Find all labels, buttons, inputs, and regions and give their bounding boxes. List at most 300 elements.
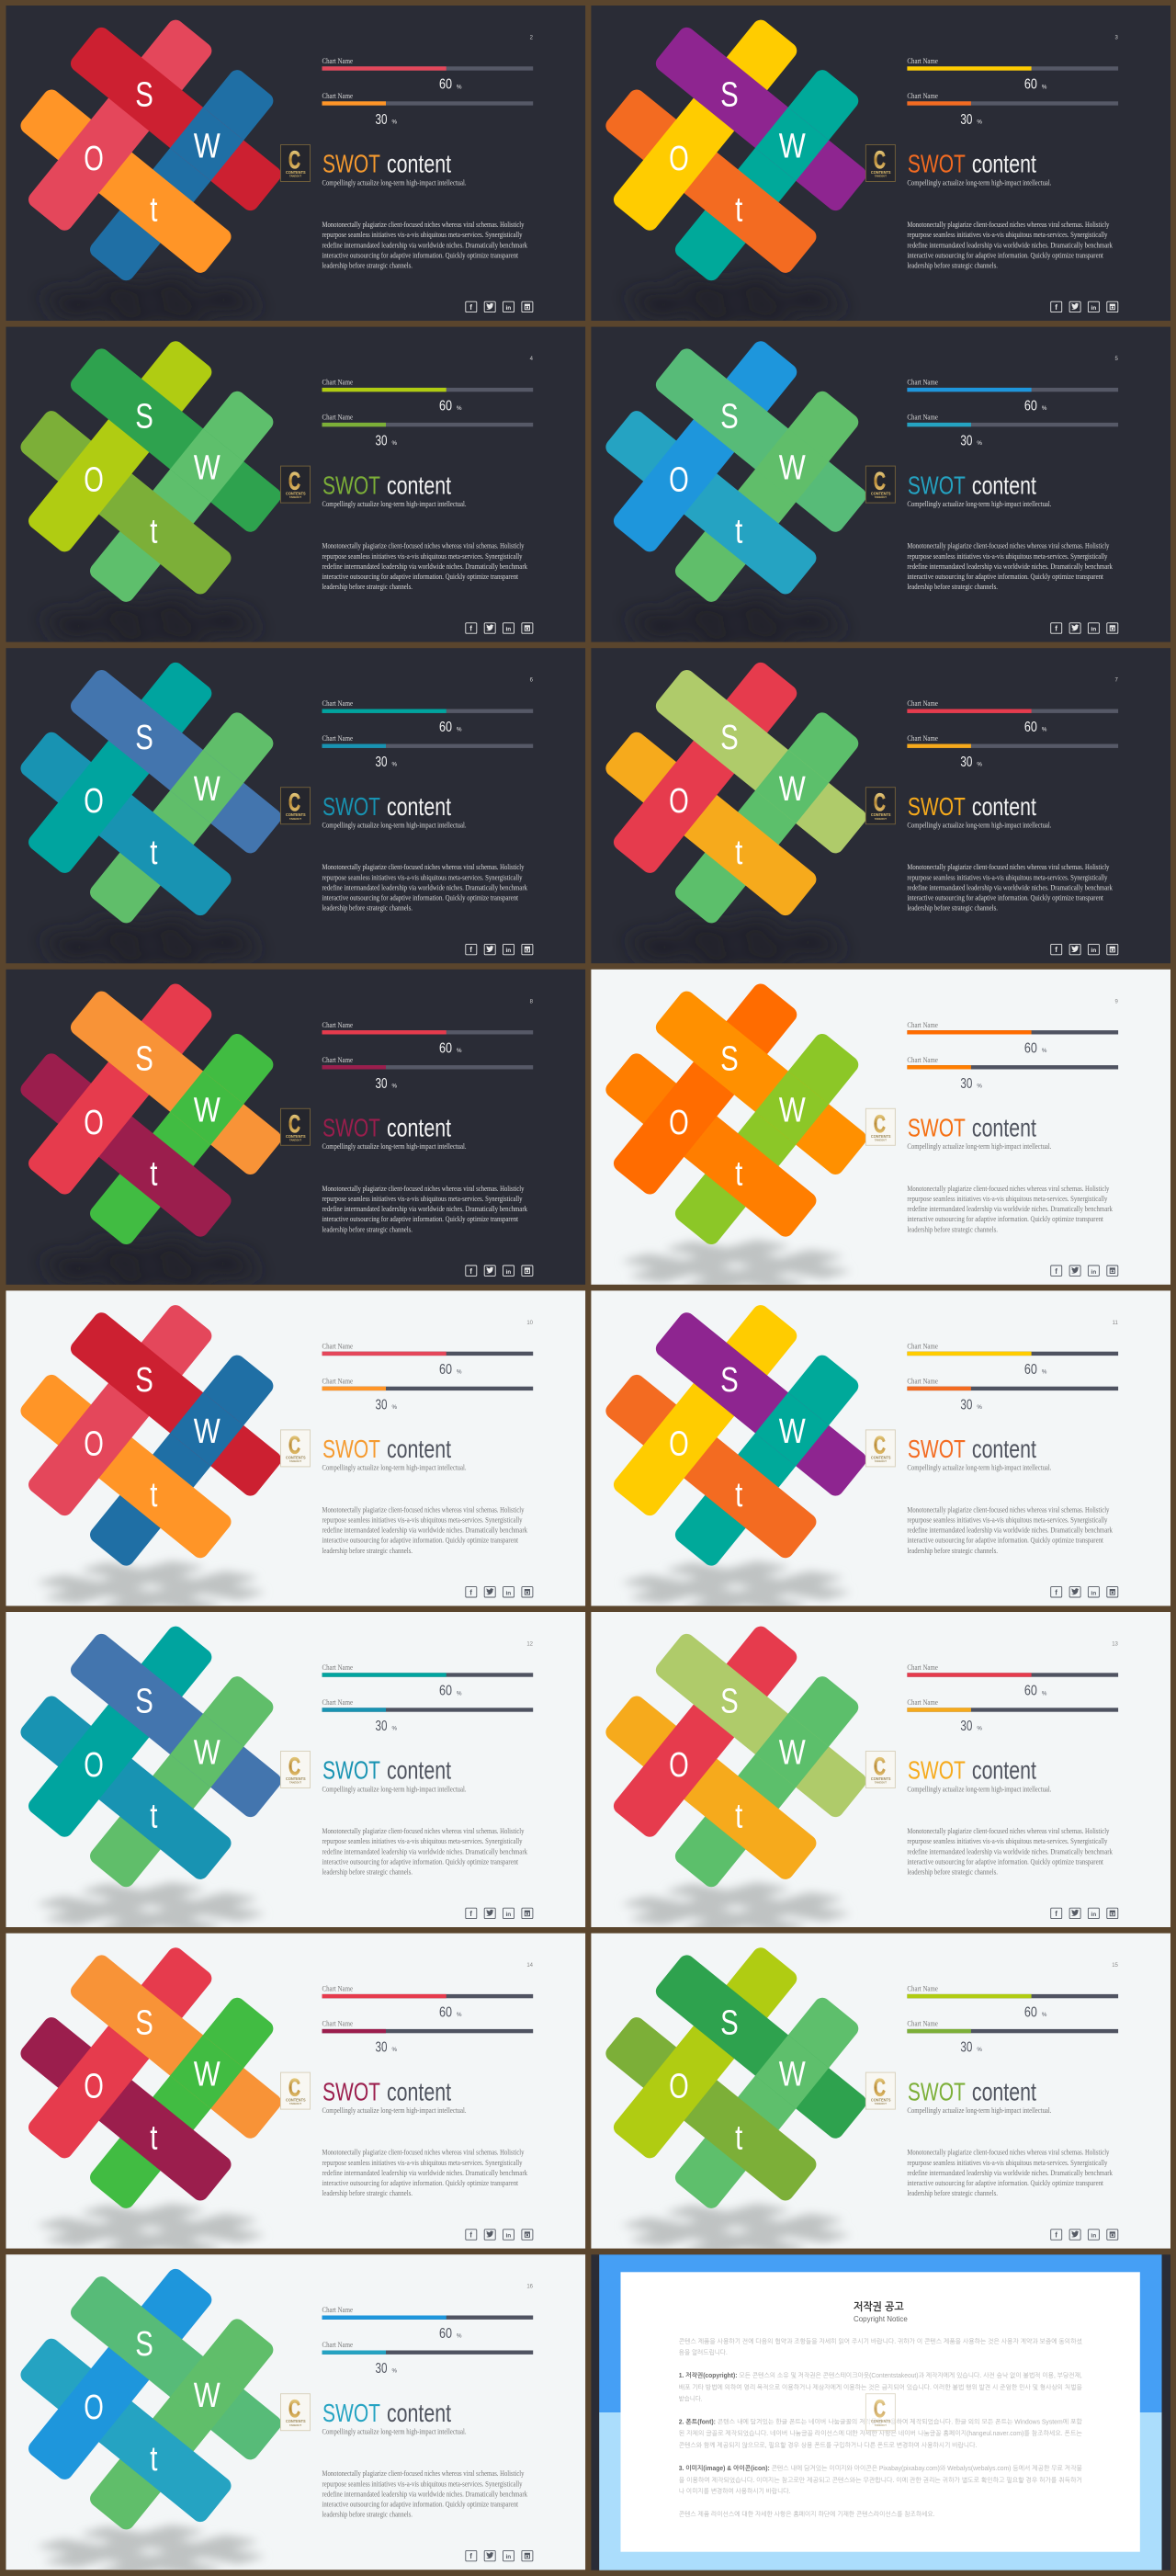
title: content [972, 1114, 1036, 1142]
progress chart 30% [907, 1698, 1118, 1734]
body text: redefine intermandated leadership via worldwide niches. Dramatically benchmark [907, 241, 1114, 249]
body text: repurpose seamless initiatives vis-a-vis ubiquitous meta-services. Synergistically [322, 231, 523, 239]
logo badge [281, 788, 311, 824]
body text: interactive outsourcing for adaptive information. Quickly optimize transparent [322, 2500, 519, 2508]
progress chart 60% [907, 699, 1118, 735]
body text: redefine intermandated leadership via worldwide niches. Dramatically benchmark [322, 2169, 528, 2177]
progress chart 60%: Chart Name [322, 699, 353, 708]
SWOT woven bars [603, 981, 870, 1248]
progress chart 30%: 30 [375, 755, 388, 770]
progress chart 30%: 30 [375, 2040, 388, 2056]
title [322, 1114, 451, 1141]
logo badge: C [288, 1431, 300, 1458]
social icons [1051, 944, 1118, 955]
social icons: in [505, 1269, 511, 1276]
logo badge: TAKEOUT [289, 2423, 301, 2427]
progress chart 30%: Chart Name [322, 734, 353, 743]
logo badge: CONTENTS [286, 2419, 306, 2423]
notice heading: 저작권 공고 [854, 2300, 904, 2313]
logo badge [281, 2394, 311, 2431]
social icons: in [505, 2233, 511, 2240]
social icons: f [469, 1588, 472, 1596]
body text: repurpose seamless initiatives vis-a-vis ubiquitous meta-services. Synergistically [907, 552, 1108, 561]
body text [322, 1185, 528, 1233]
logo badge: CONTENTS [871, 170, 891, 175]
progress chart 30% [907, 92, 1118, 128]
title [908, 1435, 1036, 1463]
social icons: in [505, 1590, 511, 1596]
body text: repurpose seamless initiatives vis-a-vis ubiquitous meta-services. Synergistically [322, 2159, 523, 2167]
logo badge: C [874, 2395, 886, 2423]
logo badge: TAKEOUT [289, 817, 301, 821]
progress chart 30% [322, 1698, 533, 1734]
SWOT woven bars: W [194, 1092, 220, 1130]
social icons: f [469, 625, 472, 633]
social icons [1051, 1587, 1118, 1597]
title: SWOT [322, 471, 380, 499]
page number: 11 [1113, 1321, 1119, 1326]
title [322, 2077, 451, 2105]
notice body text: 콘텐스 제품을 사용하기 전에 다음의 협약과 조항들을 자세히 읽어 주시기 바랍니다. 귀하가 이 콘텐스 제품을 사용하는 것은 사용자 계약과 보증에 동의하셨 [679, 2338, 1082, 2345]
progress chart 60% [907, 1985, 1118, 2020]
panel: SWOT slide 4 [6, 327, 585, 651]
body text [322, 221, 528, 270]
body text: Monotonectally plagiarize client-focused niches whereas viral schemas. Holisticly [907, 863, 1110, 871]
social icons: f [1055, 1910, 1057, 1918]
SWOT woven bars: S [135, 2325, 153, 2364]
body text: repurpose seamless initiatives vis-a-vis ubiquitous meta-services. Synergistically [322, 1195, 523, 1203]
SWOT woven bars: S [135, 1683, 153, 1721]
progress chart 60%: % [1042, 85, 1047, 90]
panel: SWOT slide 7 [591, 648, 1170, 971]
progress chart 30% [322, 92, 533, 128]
logo badge: TAKEOUT [875, 1459, 887, 1463]
SWOT woven bars: W [779, 2055, 806, 2094]
progress chart 60% [907, 1021, 1118, 1057]
social icons: in [505, 305, 511, 312]
notice body text: 된 자체의 글꼴로 제작되었습니다. 네이버 나눔글꼴 라이선스에 대한 자세한 사항은 네이버 나눔글꼴 홈페이지(hangeul.naver.com)를 참조하세요. 폰트는 [679, 2430, 1082, 2437]
title: SWOT [322, 2077, 380, 2105]
SWOT woven bars: W [779, 1734, 806, 1773]
social icons [1051, 1908, 1118, 1919]
SWOT woven bars: W [194, 448, 220, 487]
social icons: in [505, 2554, 511, 2560]
notice body text: 2. 폰트(font): 콘텐스 내에 담겨있는 한글 폰트는 네이버 나눔글꼴의 저작물을 이용하여 제작되었습니다. 한글 외의 모든 폰트는 Windows System에 포함 [679, 2419, 1082, 2426]
social icons: in [1091, 1269, 1096, 1276]
logo badge: TAKEOUT [289, 175, 301, 178]
progress chart 60%: % [457, 1049, 462, 1054]
logo badge: C [874, 789, 886, 816]
SWOT woven bars: t [735, 512, 743, 550]
shadow under SWOT mark [39, 2200, 263, 2249]
SWOT woven bars [17, 659, 285, 926]
social icons: in [1091, 948, 1096, 954]
body text: interactive outsourcing for adaptive information. Quickly optimize transparent [907, 1537, 1103, 1545]
body text: leadership before strategic channels. [907, 904, 998, 913]
panel: SWOT slide 14 [6, 1934, 585, 2257]
notice body text: 나 이미지를 변경하여 사용하시기 바랍니다. [679, 2488, 790, 2495]
SWOT woven bars [17, 1623, 285, 1890]
notice body text: 을 이용하여 제작되었습니다. 이미지는 참고로만 제공되고 콘텐스와는 무관합니다. 이에 관한 권리는 귀하가 별도로 확인하고 필요할 경우 허가를 취득하거 [679, 2477, 1082, 2484]
social icons [466, 301, 533, 312]
progress chart 30% [907, 2020, 1118, 2056]
body text [322, 863, 528, 913]
notice body text: 배포 기타 방법에 의하여 영리 목적으로 이용하거나 제삼자에게 이용하는 것은 금지되어 있습니다. 이러한 불법 행위 발견 시 준엄한 민사 및 형사상의 처벌을 [679, 2384, 1082, 2391]
SWOT woven bars: W [194, 770, 220, 809]
SWOT woven bars: O [84, 140, 104, 178]
progress chart 30%: % [391, 119, 398, 125]
progress chart 60%: Chart Name [322, 1342, 353, 1350]
body text: redefine intermandated leadership via worldwide niches. Dramatically benchmark [322, 2490, 528, 2498]
body text: repurpose seamless initiatives vis-a-vis ubiquitous meta-services. Synergistically [322, 552, 523, 561]
notice body text: 3. 이미지(image) & 아이콘(icon): 콘텐스 내에 담겨있는 이미지와 아이콘은 Pixabay(pixabay.com)와 Webalys(webalys.com) 등에서 제공한 무료 저작물 [679, 2465, 1082, 2472]
shadow under SWOT mark [35, 2525, 267, 2576]
panel: SWOT slide 10 [6, 1290, 585, 1614]
social icons [466, 1587, 533, 1597]
subtitle: Compellingly actualize long-term high-impact intellectual. [322, 822, 467, 830]
logo badge: CONTENTS [871, 1776, 891, 1781]
body text: leadership before strategic channels. [907, 1867, 998, 1877]
body text: redefine intermandated leadership via worldwide niches. Dramatically benchmark [907, 1526, 1114, 1535]
body text: interactive outsourcing for adaptive information. Quickly optimize transparent [322, 1215, 519, 1223]
SWOT woven bars [603, 1945, 870, 2211]
progress chart 60% [322, 57, 533, 93]
body text: repurpose seamless initiatives vis-a-vis ubiquitous meta-services. Synergistically [907, 1516, 1108, 1525]
SWOT woven bars: t [735, 834, 743, 872]
shadow under SWOT mark [620, 2204, 853, 2257]
logo badge: CONTENTS [286, 1455, 306, 1459]
shadow under SWOT mark [643, 279, 829, 321]
page number: 6 [530, 678, 534, 684]
SWOT woven bars [603, 338, 870, 605]
SWOT woven bars: t [735, 191, 743, 230]
progress chart 30%: Chart Name [907, 1377, 938, 1385]
body text: interactive outsourcing for adaptive information. Quickly optimize transparent [907, 573, 1103, 581]
progress chart 30%: % [977, 441, 983, 447]
notice body text [679, 2338, 1082, 2518]
SWOT woven bars: W [779, 128, 806, 166]
body text: Monotonectally plagiarize client-focused niches whereas viral schemas. Holisticly [322, 542, 525, 550]
body text: interactive outsourcing for adaptive information. Quickly optimize transparent [907, 251, 1103, 259]
progress chart 60% [907, 379, 1118, 414]
social icons [1051, 2230, 1118, 2240]
social icons [466, 2550, 533, 2561]
body text: leadership before strategic channels. [907, 261, 998, 270]
SWOT woven bars: t [150, 1155, 158, 1194]
SWOT woven bars: S [720, 397, 739, 436]
panel: copyright notice [591, 2254, 1170, 2570]
shadow under SWOT mark [643, 600, 830, 642]
logo badge: CONTENTS [286, 1776, 306, 1781]
progress chart 30%: % [391, 1405, 398, 1411]
SWOT woven bars: W [194, 128, 220, 166]
subtitle: Compellingly actualize long-term high-impact intellectual. [322, 2427, 467, 2435]
SWOT woven bars: S [135, 1040, 153, 1079]
body text: redefine intermandated leadership via worldwide niches. Dramatically benchmark [907, 2169, 1114, 2177]
title: SWOT [908, 1114, 966, 1142]
progress chart 30%: 30 [375, 1719, 388, 1734]
social icons: in [1091, 1912, 1096, 1918]
progress chart 30%: % [391, 2048, 398, 2053]
logo badge: C [874, 146, 886, 174]
progress chart 60%: Chart Name [907, 1663, 938, 1672]
progress chart 60%: Chart Name [907, 1342, 938, 1350]
logo badge [865, 145, 895, 182]
title: SWOT [908, 792, 966, 821]
logo badge: C [874, 1431, 886, 1458]
progress chart 60%: Chart Name [322, 2306, 353, 2314]
SWOT woven bars: t [150, 2118, 158, 2157]
SWOT woven bars: S [720, 1683, 739, 1721]
SWOT woven bars: t [735, 1798, 743, 1836]
body text: repurpose seamless initiatives vis-a-vis ubiquitous meta-services. Synergistically [322, 1837, 523, 1845]
progress chart 60%: 60 [439, 2326, 452, 2342]
progress chart 30%: % [977, 1405, 983, 1411]
progress chart 30%: 30 [375, 1076, 388, 1092]
logo badge: C [874, 1753, 886, 1780]
body text: repurpose seamless initiatives vis-a-vis ubiquitous meta-services. Synergistically [907, 1195, 1108, 1203]
logo badge: C [288, 146, 300, 174]
page number: 4 [530, 357, 534, 362]
progress chart 60% [322, 1985, 533, 2020]
logo badge: CONTENTS [871, 1134, 891, 1139]
body text: repurpose seamless initiatives vis-a-vis ubiquitous meta-services. Synergistically [907, 1837, 1108, 1845]
title [908, 471, 1036, 499]
shadow under SWOT mark [39, 1878, 263, 1927]
logo badge [865, 466, 895, 503]
notice body text: 콘텐스와 함께 제공되지 않으므로, 필요할 경우 상용 폰트를 구입하거나 다른 폰트로 변경하여 사용하시기 바랍니다. [679, 2442, 977, 2449]
SWOT woven bars: W [779, 1092, 806, 1130]
subtitle: Compellingly actualize long-term high-impact intellectual. [907, 1142, 1051, 1151]
progress chart 60%: % [1042, 728, 1047, 733]
body text: leadership before strategic channels. [322, 1867, 413, 1877]
SWOT woven bars [17, 1301, 285, 1569]
body text: redefine intermandated leadership via worldwide niches. Dramatically benchmark [322, 1847, 528, 1855]
progress chart 60%: 60 [1024, 2004, 1037, 2020]
subtitle: Compellingly actualize long-term high-impact intellectual. [322, 178, 467, 187]
title: content [387, 1756, 451, 1785]
social icons: in [1091, 2233, 1096, 2240]
logo badge: TAKEOUT [289, 1138, 301, 1141]
progress chart 30%: Chart Name [907, 1056, 938, 1064]
panel: SWOT slide 3 [591, 6, 1170, 329]
progress chart 30%: 30 [960, 434, 972, 449]
progress chart 60%: % [1042, 1691, 1047, 1697]
SWOT woven bars: O [84, 2068, 104, 2106]
social icons: f [1055, 2231, 1057, 2240]
body text [907, 2149, 1114, 2197]
page number: 10 [526, 1321, 534, 1326]
body text [907, 1827, 1114, 1877]
logo badge [281, 1108, 311, 1145]
title: SWOT [322, 1114, 380, 1142]
logo badge [865, 1752, 895, 1788]
social icons: f [469, 303, 472, 312]
title: content [972, 471, 1036, 499]
title [908, 1756, 1036, 1785]
social icons: f [1055, 303, 1057, 312]
social icons [466, 1908, 533, 1919]
body text: Monotonectally plagiarize client-focused niches whereas viral schemas. Holisticly [907, 542, 1110, 550]
shadow under SWOT mark [39, 1557, 263, 1606]
body text: interactive outsourcing for adaptive information. Quickly optimize transparent [907, 1857, 1103, 1866]
SWOT woven bars [603, 17, 870, 284]
social icons [466, 944, 533, 955]
body text: leadership before strategic channels. [907, 583, 998, 591]
progress chart 30% [907, 1056, 1118, 1092]
SWOT woven bars: O [669, 140, 689, 178]
body text: leadership before strategic channels. [907, 2189, 998, 2197]
title: content [387, 2399, 451, 2427]
logo badge: TAKEOUT [875, 1138, 887, 1141]
social icons: in [505, 948, 511, 954]
logo badge: CONTENTS [871, 1455, 891, 1459]
social icons: in [1091, 1590, 1096, 1596]
logo badge: C [288, 1110, 300, 1138]
progress chart 60% [322, 699, 533, 735]
progress chart 30%: 30 [960, 1076, 972, 1092]
SWOT woven bars: W [194, 2377, 220, 2415]
SWOT woven bars [17, 981, 285, 1248]
social icons: f [469, 1267, 472, 1276]
progress chart 60%: 60 [439, 398, 452, 414]
notice body text: 음을 알려드립니다. [679, 2349, 728, 2356]
logo badge [281, 1430, 311, 1467]
title [322, 1756, 451, 1785]
logo badge: CONTENTS [871, 2098, 891, 2103]
SWOT woven bars [17, 1945, 285, 2211]
title [908, 150, 1036, 178]
title: content [387, 792, 451, 821]
progress chart 60%: Chart Name [907, 1021, 938, 1029]
body text: repurpose seamless initiatives vis-a-vis ubiquitous meta-services. Synergistically [907, 2159, 1108, 2167]
SWOT woven bars: t [150, 1476, 158, 1515]
shadow under SWOT mark [642, 922, 830, 963]
panel: SWOT slide 12 [6, 1612, 585, 1935]
notice body text: 1. 저작권(copyright): 모든 콘텐스의 소유 및 저작권은 콘텐스테이크아웃(Contentstakeout)과 제작자에게 있습니다. 사전 승낙 없이 불법적 이용, 부당전재, [679, 2371, 1082, 2379]
page number: 12 [526, 1641, 534, 1647]
page number: 8 [530, 999, 534, 1004]
progress chart 60%: Chart Name [322, 1985, 353, 1993]
social icons: f [469, 946, 472, 954]
notice body text: 받습니다. [679, 2395, 703, 2402]
notice subheading: Copyright Notice [854, 2314, 908, 2323]
logo badge [865, 1108, 895, 1145]
title: SWOT [322, 792, 380, 821]
title: content [972, 2077, 1036, 2105]
SWOT woven bars: O [84, 461, 104, 500]
panel: SWOT slide 2 [6, 6, 585, 329]
body text: Monotonectally plagiarize client-focused niches whereas viral schemas. Holisticly [907, 1827, 1110, 1835]
logo badge [865, 788, 895, 824]
logo badge: TAKEOUT [289, 1781, 301, 1785]
title [322, 471, 451, 499]
body text: redefine intermandated leadership via worldwide niches. Dramatically benchmark [322, 562, 528, 571]
SWOT woven bars [17, 17, 285, 284]
logo badge [281, 145, 311, 182]
title: SWOT [908, 471, 966, 499]
social icons: f [1055, 946, 1057, 954]
title: SWOT [908, 150, 966, 178]
body text: redefine intermandated leadership via worldwide niches. Dramatically benchmark [322, 1205, 528, 1213]
progress chart 30% [322, 414, 533, 449]
logo badge: CONTENTS [286, 812, 306, 817]
page number: 13 [1112, 1641, 1119, 1647]
SWOT woven bars: t [150, 512, 158, 550]
shadow under SWOT mark [58, 279, 244, 321]
SWOT woven bars: t [735, 2118, 743, 2157]
body text: interactive outsourcing for adaptive information. Quickly optimize transparent [322, 573, 519, 581]
logo badge: CONTENTS [286, 170, 306, 175]
page number: 7 [1115, 678, 1119, 684]
progress chart 60% [322, 1021, 533, 1057]
page number: 5 [1115, 357, 1119, 362]
progress chart 30%: 30 [960, 1719, 972, 1734]
social icons: in [1091, 305, 1096, 312]
progress chart 60% [322, 379, 533, 414]
progress chart 30%: Chart Name [322, 1377, 353, 1385]
body text: Monotonectally plagiarize client-focused niches whereas viral schemas. Holisticly [322, 2469, 525, 2478]
body text [907, 1185, 1114, 1233]
title: SWOT [908, 1435, 966, 1463]
progress chart 60%: 60 [439, 1684, 452, 1699]
SWOT woven bars: t [150, 191, 158, 230]
progress chart 60%: % [457, 1691, 462, 1697]
logo badge: TAKEOUT [875, 495, 887, 499]
subtitle: Compellingly actualize long-term high-impact intellectual. [907, 2106, 1051, 2115]
shadow under SWOT mark [624, 1236, 849, 1285]
SWOT woven bars: O [84, 1104, 104, 1142]
shadow under SWOT mark [57, 922, 244, 963]
body text: interactive outsourcing for adaptive information. Quickly optimize transparent [322, 1857, 519, 1866]
SWOT woven bars: t [735, 1155, 743, 1194]
progress chart 30%: Chart Name [322, 1056, 353, 1064]
title: SWOT [908, 1756, 966, 1785]
progress chart 60% [907, 57, 1118, 93]
body text: leadership before strategic channels. [322, 2511, 413, 2519]
progress chart 60%: 60 [439, 1362, 452, 1378]
title [322, 1435, 451, 1463]
progress chart 30% [322, 1377, 533, 1413]
subtitle: Compellingly actualize long-term high-impact intellectual. [322, 1464, 467, 1472]
logo badge: TAKEOUT [875, 2423, 887, 2427]
progress chart 30%: % [977, 763, 983, 768]
body text: interactive outsourcing for adaptive information. Quickly optimize transparent [322, 251, 519, 259]
title: content [387, 1114, 451, 1142]
logo badge: C [288, 2395, 300, 2423]
body text: Monotonectally plagiarize client-focused niches whereas viral schemas. Holisticly [322, 221, 525, 229]
progress chart 30%: % [391, 1084, 398, 1089]
SWOT woven bars: W [779, 770, 806, 809]
progress chart 30% [907, 1377, 1118, 1413]
progress chart 30%: % [391, 1726, 398, 1731]
body text: redefine intermandated leadership via worldwide niches. Dramatically benchmark [322, 1526, 528, 1535]
progress chart 30%: Chart Name [322, 2020, 353, 2028]
SWOT woven bars: t [150, 834, 158, 872]
progress chart 60%: % [457, 2333, 462, 2339]
body text [907, 1505, 1114, 1555]
SWOT woven bars: S [720, 1040, 739, 1079]
body text: redefine intermandated leadership via worldwide niches. Dramatically benchmark [322, 241, 528, 249]
social icons [466, 623, 533, 633]
progress chart 60%: 60 [1024, 398, 1037, 414]
title [908, 2077, 1036, 2105]
body text: redefine intermandated leadership via worldwide niches. Dramatically benchmark [907, 1205, 1114, 1213]
shadow under SWOT mark [58, 600, 244, 642]
logo badge [281, 1752, 311, 1788]
body text: repurpose seamless initiatives vis-a-vis ubiquitous meta-services. Synergistically [907, 231, 1108, 239]
body text [322, 1827, 528, 1877]
